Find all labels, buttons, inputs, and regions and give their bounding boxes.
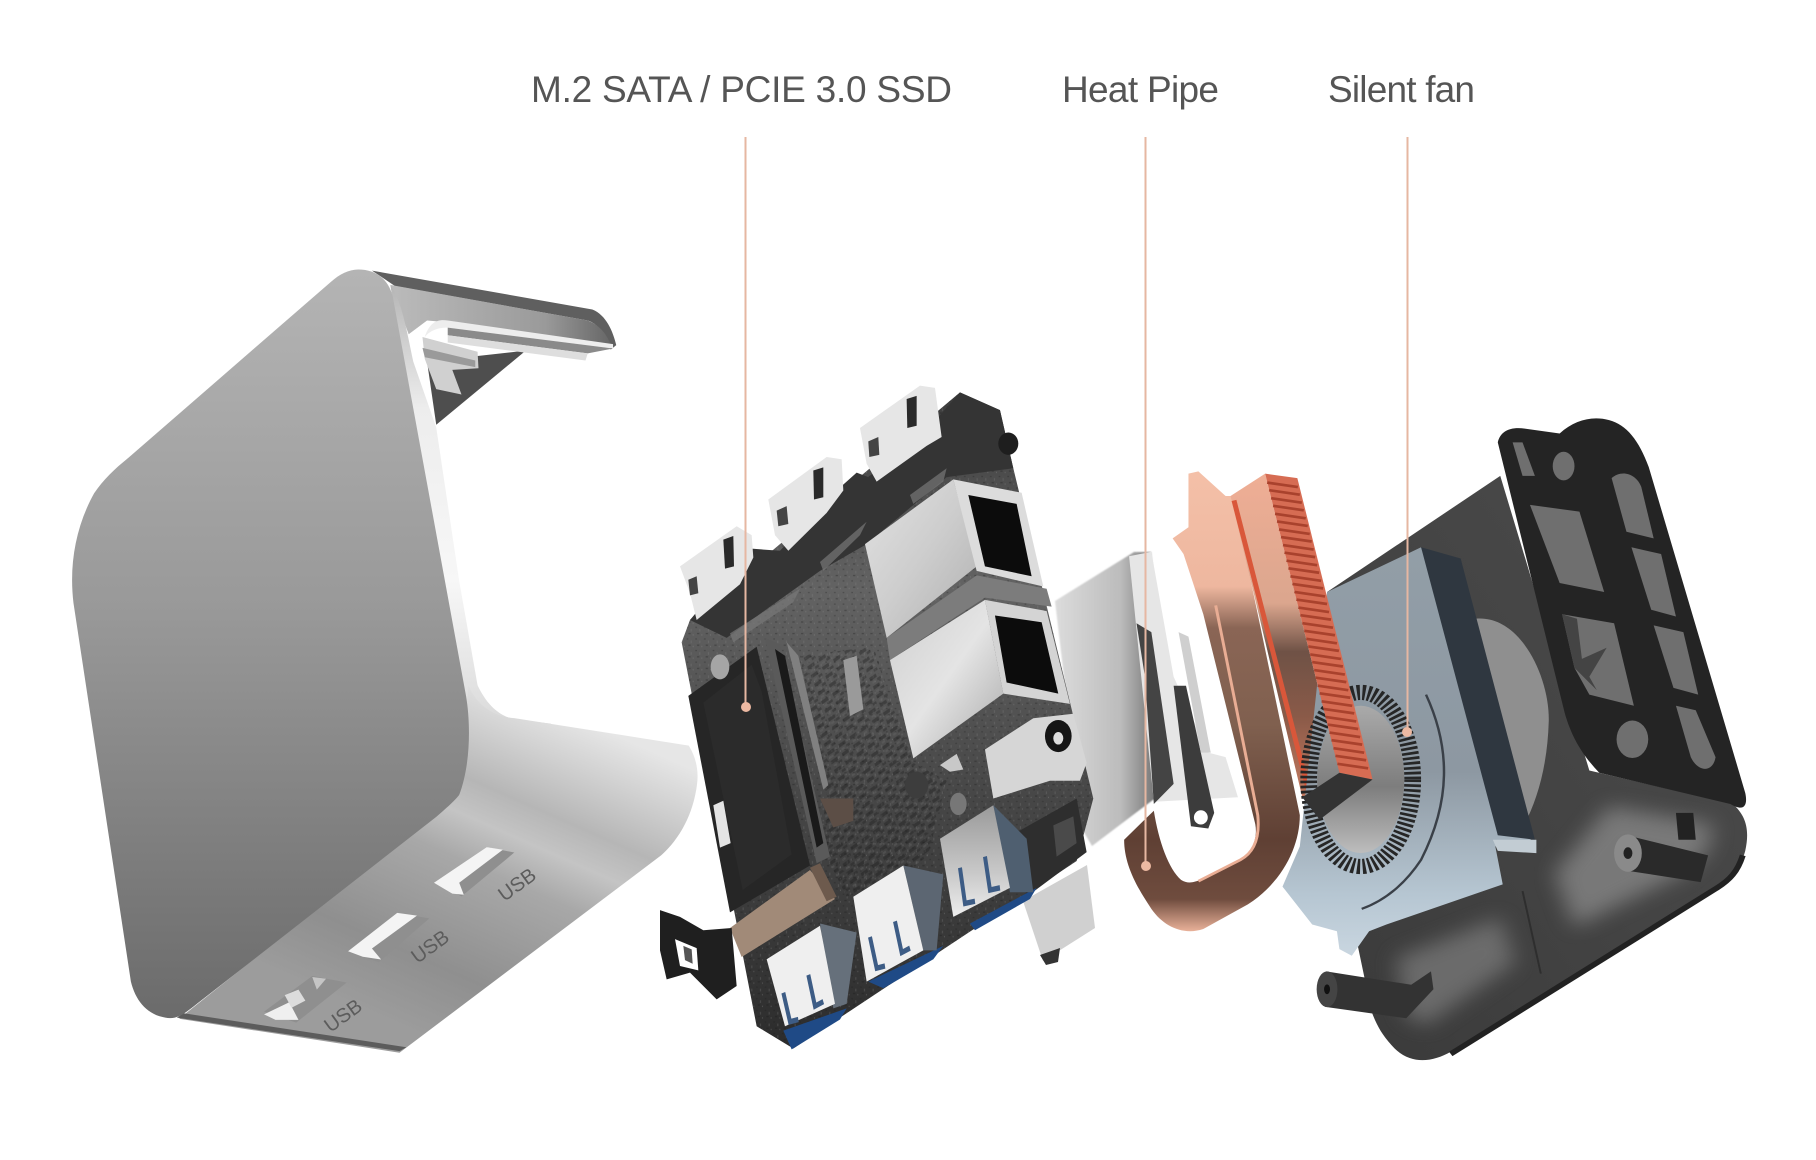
LAN port 2 [890, 600, 1070, 758]
panel: shield plate behind board [1023, 552, 1174, 965]
PCB [682, 392, 1093, 1049]
LAN port 1 [865, 479, 1043, 638]
USB label 3: USB [320, 995, 367, 1037]
audio jack [998, 432, 1018, 455]
panel: blower fan [1283, 547, 1536, 956]
red spine line [1234, 500, 1310, 795]
dark rear connector band [690, 392, 1013, 638]
label: heat pipe: Heat Pipe [1062, 69, 1219, 110]
outlet lit edge [1493, 840, 1536, 853]
panel: aluminium enclosure [72, 269, 698, 1053]
panel: motherboard [660, 386, 1093, 1049]
M.2 SSD chip [703, 665, 792, 890]
M.2 slot [688, 638, 830, 912]
callout: heat pipe leader line [1141, 137, 1151, 871]
heatsink spine [1231, 474, 1339, 797]
fan blades [1309, 692, 1413, 866]
panel: rear case [1317, 418, 1747, 1060]
fins end cap [1302, 773, 1373, 820]
panel: heatsink fins [1265, 474, 1373, 820]
standoff post left [1317, 971, 1433, 1018]
USB 3.0 port right [940, 805, 1037, 930]
brown ribbon cable [730, 799, 853, 957]
enclosure shapes [72, 269, 698, 1053]
case panel seam [1523, 891, 1541, 974]
USB label 1: USB [494, 864, 541, 906]
inner lit round area [1476, 619, 1549, 840]
USB port cutout 1 [434, 847, 514, 896]
label: SSD: M.2 SATA / PCIE 3.0 SSD [531, 69, 952, 110]
frame cutouts [1513, 442, 1716, 769]
frame hole dark corner [1562, 614, 1607, 690]
rear connector teeth [730, 468, 947, 642]
callout: fan leader line [1402, 137, 1412, 737]
HDMI port 2 [768, 457, 843, 551]
standoff post right [1614, 813, 1708, 882]
gray heat spreader bracket [1129, 552, 1238, 829]
fan housing [1283, 547, 1535, 956]
housing spiral line [1362, 695, 1444, 909]
HDMI port 1 [680, 526, 753, 620]
chip clusters [800, 647, 947, 897]
copper pipe rim line [1198, 605, 1258, 881]
SSD label [713, 801, 731, 848]
USB 3.0 port left [767, 924, 857, 1049]
black back frame [1498, 418, 1746, 808]
case highlight floor [1555, 806, 1713, 927]
USB port cutout 2 [348, 913, 429, 962]
USB port cutout 3 [264, 976, 347, 1023]
fins front [1265, 474, 1373, 779]
fan hub [1317, 706, 1404, 853]
fan outlet [1421, 547, 1535, 840]
USB 3.0 port middle [853, 866, 943, 988]
board detail highlights [905, 754, 1087, 897]
case seam rim [1451, 855, 1743, 1054]
small header [843, 656, 863, 716]
label: silent fan: Silent fan [1328, 69, 1475, 110]
case body [1327, 476, 1747, 1060]
copper heat pipe [1124, 471, 1300, 931]
panel: heat pipe and heatsink [1124, 471, 1339, 931]
strip between LAN ports [887, 575, 1052, 660]
USB label 2: USB [407, 926, 454, 968]
case highlight lower left [1396, 918, 1515, 1025]
HDMI port 3 [860, 386, 942, 482]
black bracket [660, 910, 737, 999]
callout: SSD leader line [741, 137, 751, 712]
PCB texture [682, 392, 1093, 1049]
DC power jack [985, 714, 1087, 799]
screw [711, 654, 729, 679]
